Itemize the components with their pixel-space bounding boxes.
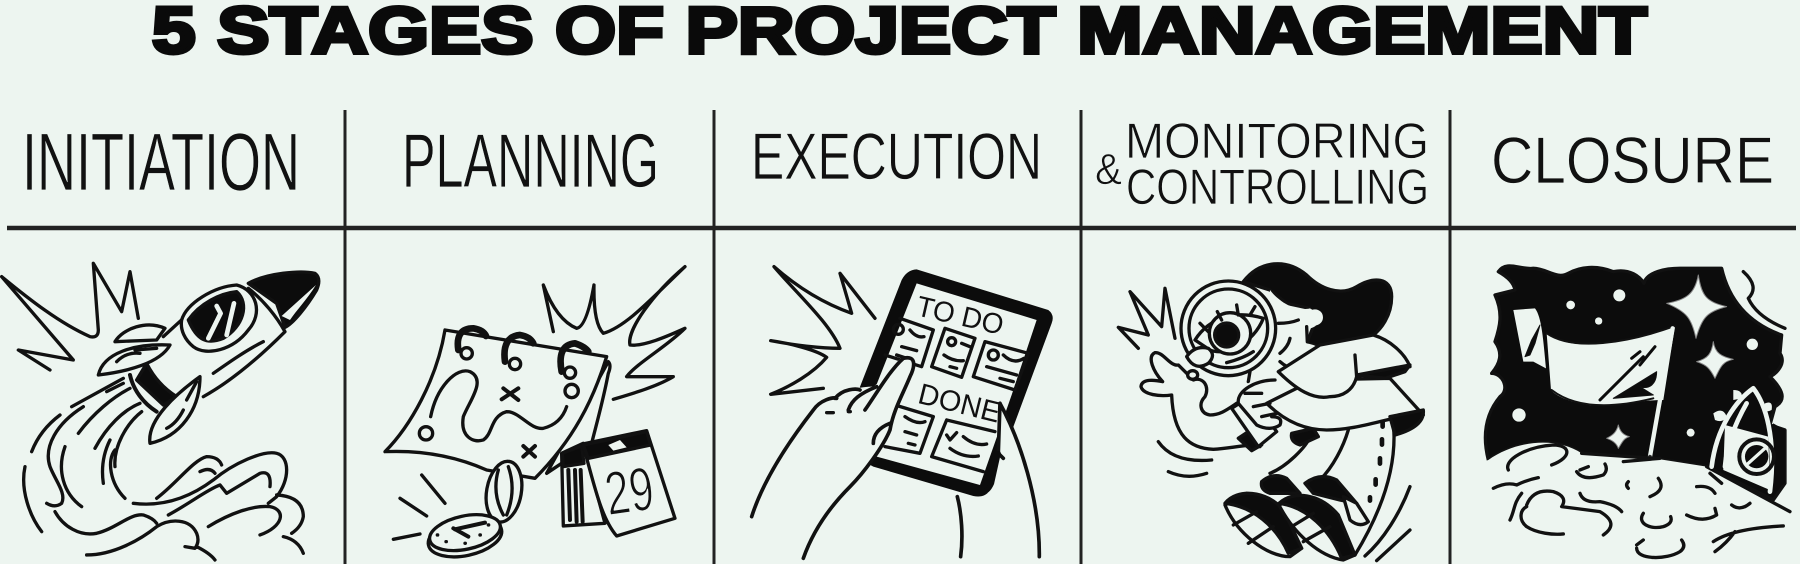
small rocket bbox=[1712, 388, 1785, 493]
face bbox=[1267, 290, 1326, 377]
moon surface bbox=[1450, 443, 1800, 563]
done label: DONE bbox=[915, 377, 1004, 430]
heading: planning: PLANNING bbox=[402, 119, 659, 204]
night sky bbox=[1485, 266, 1785, 500]
icon: rocket launch bbox=[2, 263, 319, 560]
burst bbox=[2, 263, 138, 370]
icon: person with magnifying glass bbox=[1118, 264, 1423, 561]
hair bbox=[1243, 264, 1392, 347]
tear-off calendar bbox=[562, 431, 675, 536]
heading: monitoring and controlling: MONITORING bbox=[1125, 113, 1429, 169]
heading: monitoring and controlling bbox=[1095, 113, 1429, 215]
shoes bbox=[1225, 493, 1355, 560]
burst bbox=[771, 267, 875, 394]
gripping fingers bbox=[1238, 378, 1281, 428]
tablet screen bbox=[853, 283, 1037, 485]
exhaust and smoke bbox=[32, 378, 142, 498]
ankles bbox=[1261, 476, 1300, 493]
task cards bbox=[885, 318, 1028, 472]
map sheet bbox=[385, 330, 607, 478]
burst bbox=[1118, 288, 1175, 348]
rocket body bbox=[98, 272, 319, 443]
hand and arm bbox=[1141, 353, 1260, 449]
todo label: TO DO bbox=[913, 291, 1007, 342]
magnifying glass bbox=[1181, 281, 1277, 447]
stars and dots bbox=[1512, 275, 1758, 448]
icon: hands on task tablet bbox=[750, 267, 1053, 563]
heading: execution: EXECUTION bbox=[751, 119, 1042, 193]
map route bbox=[431, 371, 567, 441]
right hand bbox=[957, 403, 1039, 557]
date number: 29 bbox=[601, 454, 658, 529]
motion lines bbox=[1158, 442, 1410, 561]
shirt bbox=[1267, 378, 1423, 430]
icon: planning calendar, compass and map bbox=[385, 267, 685, 563]
flag bbox=[1513, 308, 1675, 488]
compass bbox=[393, 458, 526, 563]
burst bbox=[543, 267, 685, 399]
icon: flag planted on the moon bbox=[1450, 266, 1800, 563]
left hand bbox=[750, 356, 914, 563]
craters bbox=[1493, 445, 1783, 558]
heading: monitoring and controlling: CONTROLLING bbox=[1126, 159, 1429, 215]
heading: initiation: INITIATION bbox=[22, 117, 300, 208]
fins bbox=[115, 325, 165, 342]
back pages bbox=[547, 362, 610, 473]
tablet frame bbox=[837, 269, 1053, 496]
heading: monitoring and controlling: & bbox=[1095, 145, 1122, 194]
binder rings bbox=[458, 328, 588, 378]
trousers bbox=[1267, 417, 1395, 557]
